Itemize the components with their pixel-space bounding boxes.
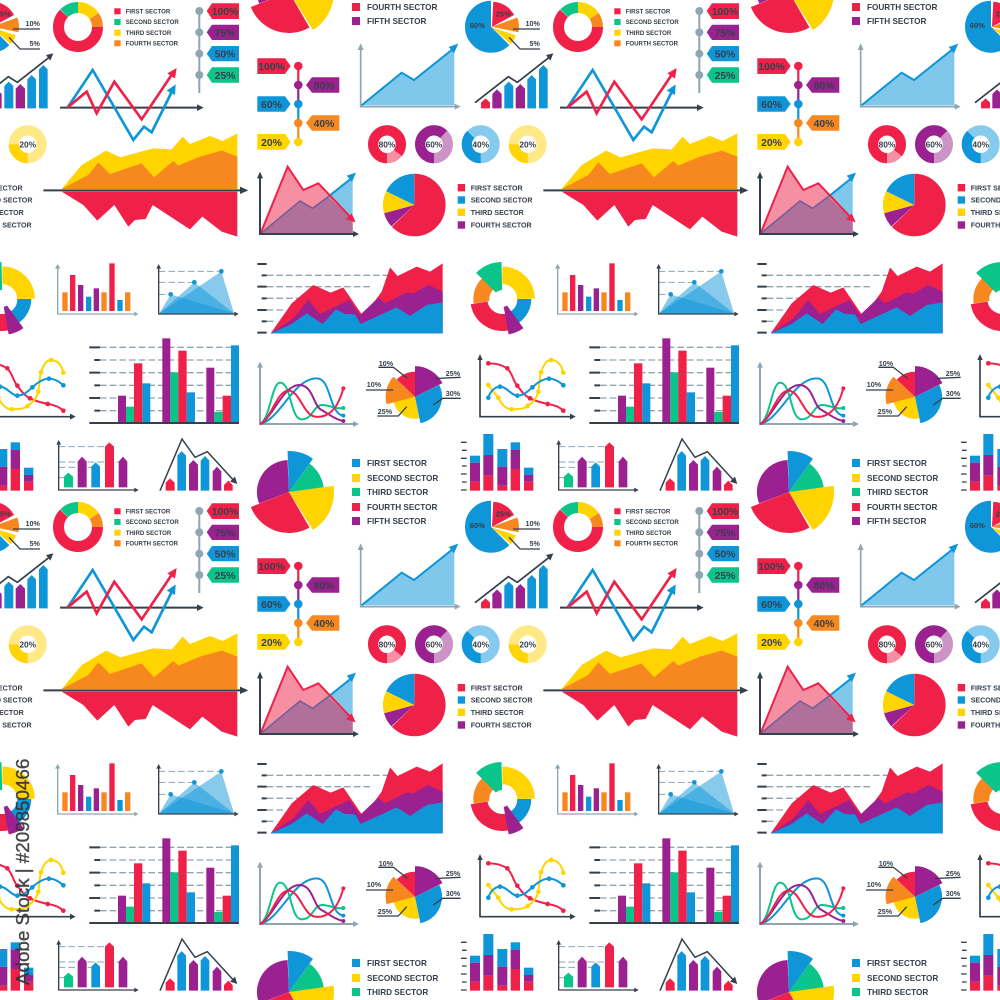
simple bar chart (555, 263, 638, 316)
donut: 80 percent: 80% (379, 139, 396, 149)
labelled pie chart: 60 25 10 5: 10% (526, 19, 540, 28)
legend: four sectors: THIRD SECTOR (471, 209, 524, 217)
triangle area chart with dots (656, 264, 739, 316)
blue area chart with arrow (358, 43, 461, 110)
labelled pie chart: 60 25 10 5: 5% (530, 39, 541, 48)
vertical percent scale (695, 3, 739, 93)
percent scale with side tags: 80% (314, 81, 334, 92)
donut: 20 percent (514, 130, 542, 158)
donut: 40 percent: 40% (472, 139, 490, 149)
labelled pie chart: 60 25 10 5: 60% (470, 21, 485, 30)
vertical percent scale: 75% (715, 28, 735, 39)
legend: five sectors: SECOND SECTOR (367, 474, 438, 483)
donut: 60 percent: 60% (426, 139, 443, 149)
legend: five sectors: FOURTH SECTOR (367, 503, 437, 512)
labelled pie chart: 60 25 10 5 (470, 8, 541, 49)
labelled pie chart: 60 25 10 5: 25% (496, 9, 511, 18)
pie chart: four sectors (392, 183, 436, 227)
legend: five sectors (352, 459, 438, 526)
labelled pie chart: 25 30 25 10 10: 25% (378, 407, 393, 416)
smooth curves chart (257, 362, 359, 427)
mirrored area chart (543, 133, 748, 237)
grouped bar chart with dashed grid (589, 338, 739, 423)
legend: donut sectors: FIRST SECTOR (626, 8, 671, 15)
legend: five sectors: FIFTH SECTOR (367, 517, 427, 526)
labelled pie chart: 25 30 25 10 10: 25% (446, 369, 461, 378)
arrow-top bar chart (556, 440, 639, 492)
stacked area chart with ticks (257, 263, 443, 333)
legend: four sectors: FOURTH SECTOR (471, 222, 532, 230)
legend: four sectors (458, 184, 532, 230)
legend: donut sectors (614, 8, 679, 48)
donut: 60 percent (420, 130, 448, 158)
percent scale with side tags: 60% (261, 100, 282, 111)
overlapping area chart: red and blue (257, 167, 359, 237)
pie chart: five exploded sectors (261, 464, 317, 520)
bars with rising arrow (475, 53, 553, 108)
legend: donut sectors: FOURTH SECTOR (626, 40, 679, 48)
vertical percent scale: 100% (712, 7, 738, 18)
legend: four sectors: SECOND SECTOR (471, 197, 532, 205)
exploded donut chart (470, 266, 535, 332)
labelled pie chart: 25 30 25 10 10: 10% (379, 359, 394, 368)
legend: five sectors: FIRST SECTOR (367, 459, 427, 468)
watermark: stock id: Adobe Stock | #209850466 (12, 759, 33, 985)
percent scale with side tags: 20% (261, 138, 282, 149)
stacked bar chart with ticks (461, 434, 533, 491)
labelled pie chart: 25 30 25 10 10 (366, 359, 461, 416)
labelled pie chart: 25 30 25 10 10: 10% (367, 380, 382, 389)
legend: five sectors: THIRD SECTOR (367, 488, 428, 497)
donut chart: four sectors (550, 0, 606, 55)
legend: donut sectors: SECOND SECTOR (626, 19, 679, 26)
dotted multi-line chart (477, 354, 576, 420)
vertical percent scale: 25% (715, 71, 735, 82)
donut: 40 percent (467, 130, 495, 158)
percent scale with side tags (257, 58, 339, 150)
labelled pie chart: 25 30 25 10 10: 30% (446, 389, 461, 398)
legend: donut sectors: THIRD SECTOR (626, 30, 672, 37)
percent scale with side tags: 40% (314, 119, 334, 130)
donut: 80 percent (373, 130, 401, 158)
vertical percent scale: 50% (715, 50, 735, 61)
percent scale with side tags: 100% (258, 62, 285, 73)
declining bars with arrow (660, 439, 737, 491)
donut: 20 percent: 20% (519, 139, 537, 149)
zigzag line chart: blue and red (560, 68, 704, 140)
legend: four sectors: FIRST SECTOR (471, 184, 523, 192)
